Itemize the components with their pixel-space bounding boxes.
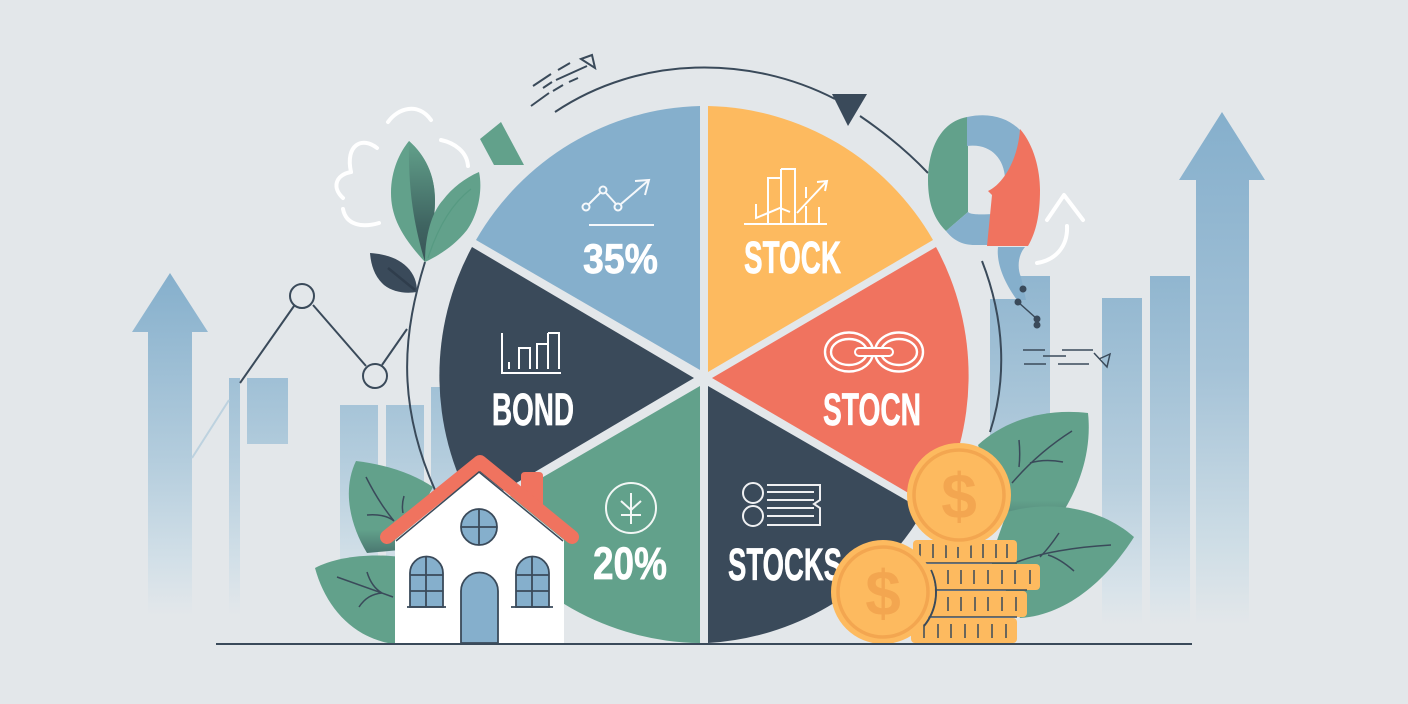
coin: top [907,443,1011,547]
roof [387,462,572,537]
label: BOND: BOND [492,384,574,435]
leaf vein [428,189,471,258]
leaf: front [315,555,400,643]
right rising arrow [1179,112,1265,625]
slice: red stocn [712,247,969,508]
slice: yellow stock [708,106,933,372]
coin stack [911,540,1040,643]
leaf veins [337,477,404,607]
pie chart [439,106,969,643]
label: STOCN: STOCN [823,384,921,435]
label: 20%: 20% [593,538,667,589]
left window [407,556,446,607]
right leaves [978,412,1134,618]
blue segment [946,115,1020,245]
ground line [216,643,1192,645]
white up arrow [1037,195,1083,263]
house body [395,471,564,643]
tail [998,247,1026,300]
icon: line trend [582,180,654,225]
slice: blue 35% [476,106,700,370]
left rising arrow [132,273,208,615]
cloud outline [336,109,468,225]
green segment [928,117,968,231]
label: STOCKS: STOCKS [728,539,842,590]
roof underline [396,472,563,541]
icon: bar chart [502,333,561,373]
icon: bars with arrow [744,169,827,224]
floating green shape [480,122,524,165]
label: STOCK: STOCK [744,232,841,283]
house [387,462,572,643]
right background bars [990,276,1190,625]
round window [461,509,497,545]
dark leaf vein [388,268,415,290]
leaf: tall shade [409,141,435,262]
icon: circled plant [606,483,656,533]
small flying arrow [531,55,595,106]
top orbit arrow [555,67,1001,432]
leaf: tall left [391,141,435,262]
leaf: back [349,461,433,553]
plant stem [407,262,435,490]
coin: bottom: $ [865,557,901,629]
door [461,573,498,643]
leaf: dark [370,253,417,293]
icon: chain link [825,332,923,372]
coin: top: $ [941,460,977,532]
coin: bottom [831,540,936,644]
leaf: top [978,412,1089,530]
line chart [192,284,407,458]
left leaves [315,461,433,643]
slice: green 20% [476,386,700,643]
leaf: right [425,172,480,262]
red segment [987,129,1040,246]
slice: navy bond [439,247,694,508]
slice: navy stocks [708,386,918,643]
chimney [521,472,543,510]
right window [511,556,553,607]
head-shaped pie icon [928,115,1040,300]
leaf: bottom [990,506,1134,618]
dots and dashes [1015,286,1110,367]
plant leaves [370,141,480,293]
leaf veins [1012,431,1111,571]
left background bars [229,378,461,615]
icon: list [743,483,820,526]
label: 35%: 35% [583,235,658,282]
